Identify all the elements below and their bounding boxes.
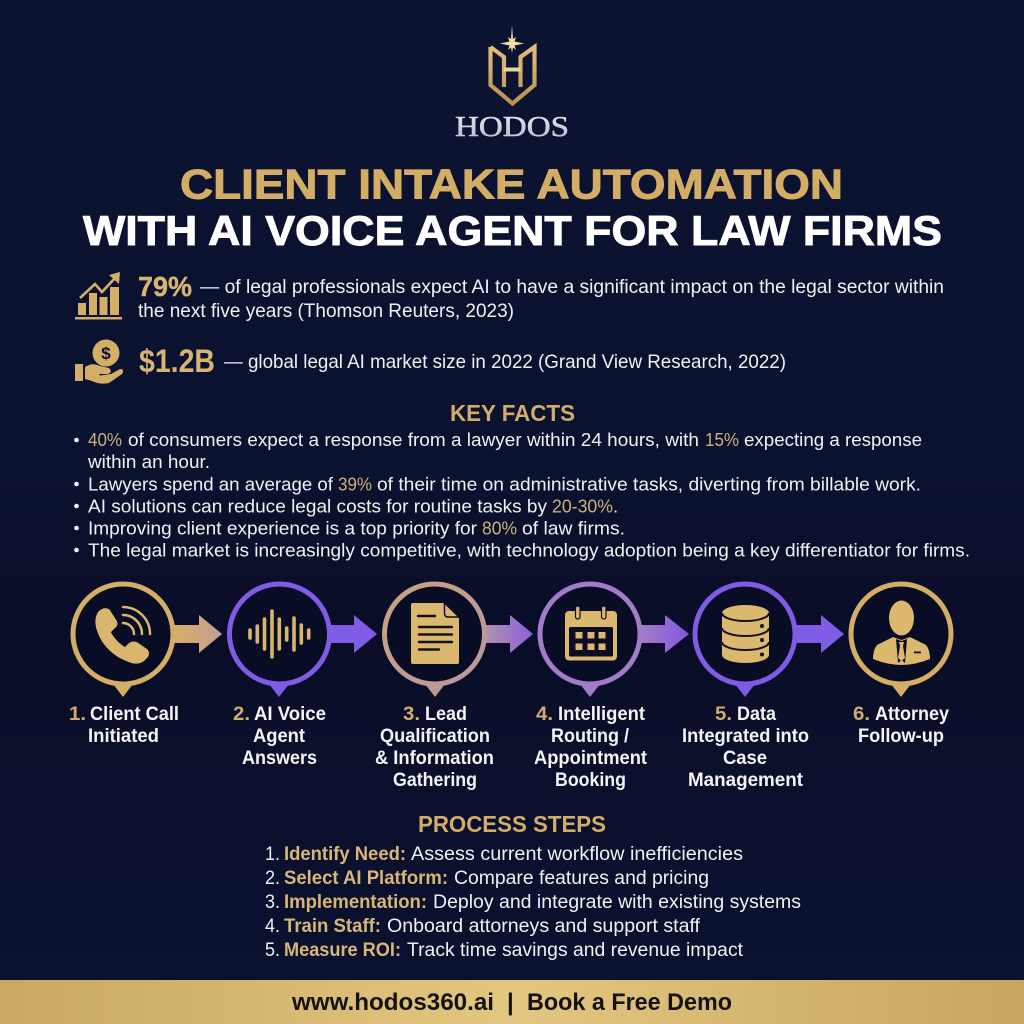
fact 5: The legal market is increasingly competitive, with technology adoption being a key differentiator for firms. <box>88 540 970 560</box>
title line 1: CLIENT INTAKE AUTOMATION <box>180 160 843 208</box>
step label 5: 5. <box>715 703 732 725</box>
step label 5: Data <box>737 703 776 725</box>
step 2 circle: waveform <box>230 584 330 697</box>
process step 5: Measure ROI: <box>284 940 401 961</box>
process step 4: Onboard attorneys and support staff <box>387 916 701 937</box>
step label 4: Routing / <box>551 725 630 747</box>
fact 4: of law firms. <box>522 518 625 538</box>
icon: hand with coin: $ <box>101 344 111 363</box>
step label 5 <box>682 703 809 791</box>
step label 2 <box>233 703 326 769</box>
stat text line 1: — of legal professionals expect AI to have a significant impact on the legal sector within <box>200 276 944 298</box>
step label 3: 3. <box>403 703 420 725</box>
step label 3: Lead <box>425 703 467 725</box>
process step 3: 3. <box>265 892 280 913</box>
step label 6: Attorney <box>875 703 949 725</box>
process step 3: Implementation: <box>284 892 427 913</box>
step label 3 <box>375 703 494 791</box>
title line 2: WITH AI VOICE AGENT FOR LAW FIRMS <box>83 207 942 254</box>
process steps list <box>265 844 801 961</box>
footer bar <box>0 980 1024 1024</box>
step label 5: Case <box>723 747 767 769</box>
process step 5: Track time savings and revenue impact <box>407 940 744 961</box>
stat: $1.2B <box>75 340 786 384</box>
process step 4: Train Staff: <box>284 916 381 937</box>
process step 4: 4. <box>265 916 280 937</box>
process step 3: Deploy and integrate with existing systems <box>433 892 801 913</box>
arrow 4 <box>639 615 689 653</box>
fact 4: 80% <box>482 518 517 538</box>
fact 2: of their time on administrative tasks, diverting from billable work. <box>377 474 921 494</box>
fact 2: Lawyers spend an average of <box>88 474 334 494</box>
icon: star <box>500 25 524 53</box>
step label 4: Appointment <box>534 747 647 769</box>
fact 3: AI solutions can reduce legal costs for routine tasks by <box>88 496 548 516</box>
arrow 3 <box>484 615 533 653</box>
title <box>83 160 942 254</box>
step label 1: 1. <box>69 703 86 725</box>
step label 1 <box>69 703 179 747</box>
fact 3: . <box>613 496 618 516</box>
icon: shield H mark <box>490 47 534 104</box>
step 6 circle: attorney <box>851 584 951 697</box>
stat text line 2: the next five years (Thomson Reuters, 2023) <box>138 300 514 322</box>
heading: key facts: KEY FACTS <box>450 400 575 426</box>
process step 2: 2. <box>265 868 280 889</box>
process step 2 <box>265 868 709 889</box>
step 5 circle: database <box>695 584 795 697</box>
step label 5: Integrated into <box>682 725 809 747</box>
logo: Hodos <box>455 25 569 143</box>
process step 1: Identify Need: <box>284 844 406 865</box>
step label 5: Management <box>688 769 803 791</box>
fact 1: expecting a response <box>744 429 922 450</box>
process step 1 <box>265 844 743 865</box>
stat: 79% <box>75 271 944 322</box>
step label 1: Initiated <box>88 725 159 747</box>
process step 1: 1. <box>265 844 280 865</box>
fact 1: 40% <box>88 429 122 450</box>
footer url: www.hodos360.ai <box>291 989 494 1016</box>
step label 6 <box>853 703 949 747</box>
fact 4: Improving client experience is a top priority for <box>88 518 477 538</box>
process step 1: Assess current workflow inefficiencies <box>411 844 743 865</box>
step 1 circle: phone <box>73 584 173 697</box>
step 3 circle: document <box>384 584 484 697</box>
step label 6: 6. <box>853 703 870 725</box>
icon: hand with coin <box>75 340 123 384</box>
fact 1 <box>74 429 922 472</box>
step label 2: 2. <box>233 703 250 725</box>
stat value: $1.2B <box>139 343 215 379</box>
step label 4: Booking <box>555 769 626 791</box>
fact 1: of consumers expect a response from a lawyer within 24 hours, with <box>128 429 699 450</box>
fact 3: 20-30% <box>552 496 613 516</box>
process step 5: 5. <box>265 940 280 961</box>
fact 2: 39% <box>338 474 372 494</box>
step label 4: 4. <box>536 703 553 725</box>
step label 4: Intelligent <box>558 703 645 725</box>
process step 4 <box>265 916 701 937</box>
footer call to action: Book a Free Demo <box>527 989 732 1016</box>
step label 4 <box>534 703 647 791</box>
step label 2: Answers <box>242 747 317 769</box>
heading: process steps: PROCESS STEPS <box>418 811 606 837</box>
footer separator: | <box>507 989 514 1016</box>
arrow 2 <box>329 615 377 653</box>
process step 5 <box>265 940 744 961</box>
process step 2: Select AI Platform: <box>284 868 448 889</box>
step label 3: Gathering <box>393 769 477 791</box>
fact 1: within an hour. <box>87 451 210 472</box>
logo wordmark: HODOS <box>455 111 569 143</box>
process step 2: Compare features and pricing <box>454 868 709 889</box>
fact 1: 15% <box>705 429 739 450</box>
key facts list <box>74 429 970 560</box>
arrow 1 <box>172 615 222 653</box>
step label 3: & Information <box>375 747 494 769</box>
fact 4 <box>74 518 625 538</box>
stat text: — global legal AI market size in 2022 (Grand View Research, 2022) <box>224 351 786 373</box>
process flow diagram <box>73 584 951 697</box>
fact 2 <box>74 474 921 494</box>
step label 2: AI Voice <box>254 703 326 725</box>
arrow 5 <box>794 615 844 653</box>
stat value: 79% <box>138 271 192 302</box>
step 4 circle: calendar <box>540 584 640 697</box>
icon: growth chart <box>75 272 122 320</box>
process step 3 <box>265 892 801 913</box>
step label 2: Agent <box>253 725 305 747</box>
step label 1: Client Call <box>90 703 179 725</box>
step label 6: Follow-up <box>858 725 944 747</box>
step label 3: Qualification <box>380 725 490 747</box>
